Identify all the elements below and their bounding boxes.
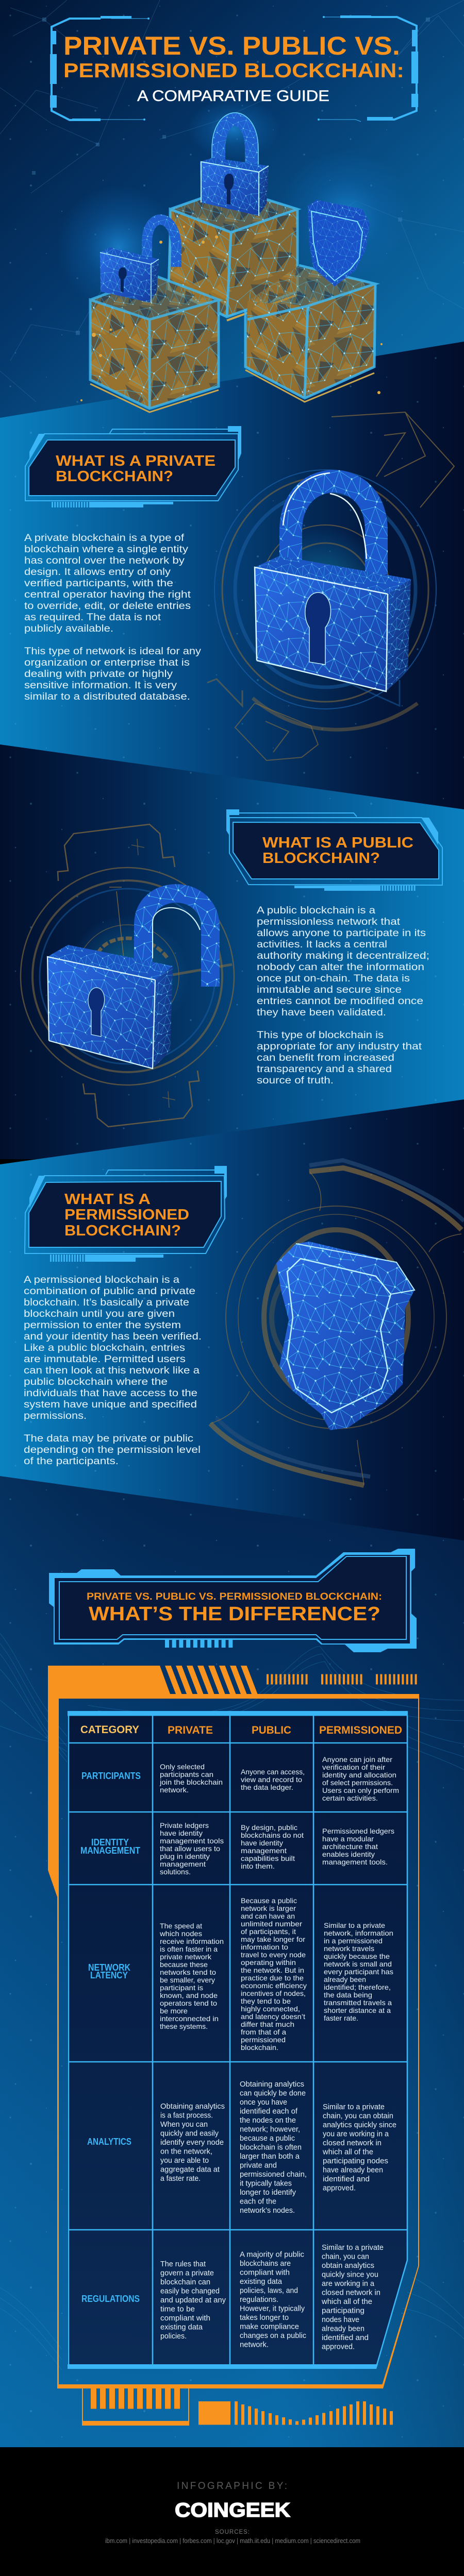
row: analytics: network; however, — [240, 2126, 300, 2134]
row: network latency: incentives of nodes, — [241, 1990, 306, 1997]
row: regulations: make compliance — [240, 2323, 299, 2331]
row: network latency: operators tend to — [160, 1999, 217, 2007]
heading: WHAT IS A — [64, 1191, 151, 1208]
row: regulations: blockchains are — [240, 2260, 291, 2268]
hero network lines — [0, 0, 464, 402]
section 2 text: they have been validated. — [257, 1007, 386, 1018]
section 2 text: once put on-chain. The data is — [257, 973, 410, 984]
row: participants: participants can — [160, 1771, 213, 1778]
row: network latency: practice due to the — [241, 1974, 304, 1982]
row labels: NETWORK — [88, 1962, 131, 1973]
hero title frame — [50, 15, 418, 122]
heading: BLOCKCHAIN? — [56, 468, 173, 485]
row: network latency: highly connected, — [241, 2005, 300, 2013]
row: network latency: from that of a — [241, 2028, 286, 2036]
row labels: ANALYTICS — [87, 2136, 131, 2147]
section 2 text: allows anyone to participate in its — [257, 928, 426, 939]
section 3 text: A permissioned blockchain is a — [24, 1275, 179, 1285]
table header: PERMISSIONED — [319, 1724, 402, 1736]
row: regulations: policies. — [160, 2332, 187, 2341]
row: analytics: When you can — [160, 2121, 208, 2129]
section 2 decorative watch rings — [21, 824, 234, 1127]
heading: WHAT IS A PUBLIC — [262, 835, 413, 851]
sources: SOURCES: — [215, 2529, 250, 2535]
row: regulations: regulations. — [240, 2296, 278, 2304]
section 1 text: dealing with private or highly — [24, 669, 173, 680]
row: regulations: compliant with — [240, 2269, 290, 2277]
credit line: INFOGRAPHIC BY: — [177, 2481, 287, 2492]
row: network latency: network, information — [324, 1929, 393, 1937]
row: network latency — [159, 1897, 393, 2052]
section 1 text: central operator having the right — [24, 589, 191, 600]
section 2 text: permissionless network that — [257, 917, 401, 927]
row: analytics: quickly and easily — [160, 2130, 219, 2138]
section 2 text: can benefit from increased — [257, 1053, 394, 1063]
row: network latency: which nodes — [159, 1930, 202, 1938]
section 3 text: permission to enter the system — [24, 1320, 181, 1331]
row: regulations: takes longer to — [240, 2314, 289, 2322]
icon: centre block — [169, 188, 297, 320]
hero title — [63, 31, 404, 105]
section 1 text: to override, edit, or delete entries — [24, 601, 191, 612]
row labels: REGULATIONS — [81, 2293, 140, 2304]
section 3 text: Like a public blockchain, entries — [24, 1343, 185, 1353]
section 3 text: system have unique and specified — [24, 1399, 197, 1410]
section 3 text: permissions. — [24, 1411, 87, 1421]
row: identity management: management tools — [160, 1837, 224, 1845]
row: analytics: can quickly be done — [240, 2090, 306, 2098]
logo: CoinGeek: COINGEEK — [175, 2499, 290, 2521]
row: identity management: that allow users to — [160, 1845, 220, 1853]
icon: public blockchain open padlock — [47, 893, 210, 1069]
row: analytics: larger than both a — [240, 2153, 300, 2161]
difference heading panel — [49, 1549, 417, 1652]
row: network latency: be more — [160, 2007, 188, 2015]
row: network latency: receive information — [160, 1938, 224, 1945]
section 1 text: as required. The data is not — [24, 612, 161, 623]
row: analytics: Obtaining analytics — [160, 2103, 225, 2111]
row: network latency: operating within — [241, 1959, 296, 1967]
row: participants: network. — [160, 1786, 189, 1794]
row: participants: verification of their — [322, 1764, 386, 1771]
row: network latency: private network — [160, 1953, 211, 1961]
row: participants: the data ledger. — [241, 1784, 293, 1791]
heading — [64, 1191, 189, 1239]
section 1 text: design. It allows entry of only — [24, 567, 171, 578]
row: identity management: Private ledgers — [160, 1822, 209, 1829]
section 2 text: A public blockchain is a — [257, 905, 376, 916]
section 1 text: sensitive information. It is very — [24, 680, 177, 691]
row: analytics: permissioned chain, — [240, 2171, 307, 2179]
row: participants: Anyone can access, — [241, 1768, 305, 1776]
row: analytics: network’s nodes. — [240, 2207, 295, 2215]
row: network latency: known, and node — [160, 1992, 218, 1999]
row: identity management: architecture that — [322, 1843, 378, 1851]
row: analytics: you are working in a — [323, 2130, 389, 2138]
section 3 text: blockchain. It’s basically a private — [24, 1297, 189, 1308]
table header — [80, 1724, 402, 1736]
row: identity management: have identity — [160, 1829, 203, 1837]
row: identity management: plug in identity — [160, 1853, 210, 1860]
row: analytics: participating nodes — [323, 2157, 388, 2165]
row: network latency: networks tend to — [160, 1969, 216, 1976]
row: regulations: identified and — [322, 2334, 369, 2342]
section 2 heading panel — [226, 809, 442, 891]
row: regulations: participating — [322, 2307, 364, 2315]
section 2 text: nobody can alter the information — [257, 962, 424, 973]
icon: left block — [90, 276, 219, 412]
heading: WHAT’S THE DIFFERENCE? — [89, 1603, 380, 1625]
section 3 text: The data may be private or public — [24, 1433, 193, 1444]
table header: PRIVATE — [168, 1724, 213, 1736]
section 3 text: individuals that have access to the — [24, 1388, 197, 1399]
row: network latency: travel to every node — [241, 1951, 306, 1959]
section 1 text: A private blockchain is a type of — [24, 533, 185, 544]
section 1 text: similar to a distributed database. — [24, 691, 190, 702]
row: analytics: approved. — [323, 2184, 356, 2193]
row: analytics: aggregate data at — [160, 2166, 220, 2174]
hero title: PERMISSIONED BLOCKCHAIN: — [63, 60, 404, 82]
sources — [105, 2529, 360, 2545]
background waves — [0, 1633, 464, 2370]
heading: BLOCKCHAIN? — [64, 1223, 181, 1239]
row: network latency: and can have an — [241, 1912, 295, 1920]
bottom orange decoration — [82, 2388, 393, 2426]
row: regulations: chain, you can — [322, 2252, 369, 2261]
section 1 text: This type of network is ideal for any — [24, 646, 202, 657]
row: identity management: enables identity — [322, 1851, 375, 1858]
row: regulations: policies, laws, and — [240, 2286, 298, 2295]
row: regulations: time to be — [160, 2305, 195, 2313]
section 3 heading panel — [25, 1166, 227, 1262]
row: analytics: private and — [240, 2162, 277, 2170]
heading: BLOCKCHAIN? — [262, 850, 380, 867]
section 3 text: public blockchain where the — [24, 1377, 168, 1387]
row: participants: join the blockchain — [159, 1778, 223, 1786]
row: network latency: and latency doesn’t — [241, 2013, 305, 2021]
row: regulations: However, it typically — [240, 2305, 305, 2313]
section 1 text — [24, 533, 202, 702]
icon: top padlock — [200, 113, 269, 216]
row labels: IDENTITY — [91, 1837, 129, 1848]
icon: private blockchain closed padlock — [255, 473, 411, 691]
heading: PRIVATE VS. PUBLIC VS. PERMISSIONED BLOCKCHAIN: — [87, 1591, 382, 1602]
icon: hero shield — [308, 200, 370, 286]
comparison table — [68, 1711, 408, 2369]
row: identity management: have identity — [241, 1839, 283, 1847]
section 1 text: verified participants, with the — [24, 578, 173, 589]
row: network latency: transmitted travels a — [324, 1999, 392, 2007]
sources: ibm.com | investopedia.com | forbes.com | loc.gov | math.iit.edu | medium.com | sciencedirect.com — [105, 2537, 360, 2545]
row: regulations: existing data — [160, 2324, 203, 2332]
gold particles — [80, 226, 383, 401]
row: identity management: have a modular — [322, 1835, 374, 1843]
row: network latency: blockchain. — [241, 2044, 278, 2052]
row: network latency: participant is — [160, 1984, 203, 1992]
row: regulations: obtain analytics — [322, 2262, 374, 2270]
row: analytics: closed network in — [323, 2139, 382, 2147]
row: network latency: The speed at — [160, 1922, 202, 1930]
heading — [56, 453, 216, 485]
row: analytics: Similar to a private — [323, 2103, 385, 2111]
row: identity management: Permissioned ledgers — [322, 1827, 394, 1835]
section 2 text: transparency and a shared — [257, 1064, 392, 1075]
row: analytics: because a public — [240, 2134, 295, 2143]
row: network latency: may take longer for — [241, 1936, 306, 1943]
orange table frame — [48, 1666, 419, 2388]
section 3 text: and your identity has been verified. — [24, 1331, 202, 1342]
section 2 text — [257, 905, 429, 1086]
row: regulations: A majority of public — [240, 2250, 304, 2259]
row: identity management: management — [160, 1860, 206, 1868]
row: regulations: network. — [240, 2341, 269, 2349]
row: analytics: a faster rate. — [160, 2175, 201, 2183]
section 2 text: This type of blockchain is — [257, 1030, 384, 1041]
row: participants: identity and allocation — [322, 1771, 396, 1779]
section 3 decorative rings — [210, 1160, 464, 1485]
heading — [262, 835, 413, 867]
row: analytics: identify every node — [160, 2139, 224, 2147]
row: analytics: is a fast process. — [160, 2111, 213, 2120]
row: regulations: changes on a public — [240, 2332, 306, 2340]
row: regulations: compliant with — [160, 2314, 210, 2323]
row labels: LATENCY — [90, 1970, 128, 1980]
row: identity management: into them. — [241, 1862, 275, 1870]
row labels — [80, 1770, 141, 2304]
section 3 text: of the participants. — [24, 1456, 119, 1467]
row: analytics: which all of the — [322, 2148, 373, 2157]
row: analytics: have already been — [323, 2166, 383, 2174]
heading: WHAT IS A PRIVATE — [56, 453, 216, 469]
section 1 decorative rings — [207, 412, 454, 760]
row: regulations: which all of the — [321, 2298, 372, 2306]
row: network latency: already been — [324, 1976, 366, 1984]
row: participants: view and record to — [241, 1776, 302, 1784]
icon: right block — [245, 265, 375, 402]
row: analytics: blockchain is often — [240, 2143, 302, 2151]
section 3 text: combination of public and private — [24, 1286, 195, 1297]
row: regulations: The rules that — [160, 2260, 206, 2268]
hero title: PRIVATE VS. PUBLIC VS. — [63, 31, 400, 60]
row: network latency: network travels — [324, 1945, 374, 1953]
row: network latency: shorter distance at a — [324, 2007, 391, 2014]
row: network latency: unlimited number — [241, 1920, 303, 1928]
row: participants: Anyone can join after — [322, 1756, 392, 1764]
row: analytics: you are able to — [160, 2157, 209, 2165]
row: regulations: are working in a — [322, 2280, 375, 2288]
row: regulations: approved. — [322, 2343, 355, 2351]
row: analytics: identified and — [323, 2175, 370, 2183]
heading: PERMISSIONED — [64, 1207, 189, 1223]
row: analytics — [160, 2080, 396, 2215]
footer — [0, 2447, 464, 2576]
row: regulations: quickly since you — [322, 2271, 378, 2279]
row: identity management: management tools. — [322, 1858, 388, 1866]
hero illustration: blocks with locks and shield — [57, 98, 412, 412]
row: identity management: capabilities built — [241, 1855, 295, 1862]
icon: open padlock — [100, 219, 176, 302]
row: network latency: they tend to be — [241, 1997, 291, 2005]
section 3 text: are immutable. Permitted users — [24, 1354, 186, 1365]
row: network latency: network is small and — [324, 1960, 392, 1968]
row: network latency: interconnected in — [160, 2015, 219, 2023]
section 3 text: depending on the permission level — [24, 1445, 201, 1455]
row: network latency: quickly because the — [324, 1953, 390, 1960]
section 2 text: authority making it decentralized; — [257, 951, 429, 961]
row: network latency: the data being — [324, 1991, 372, 1999]
row: analytics: identified each of — [240, 2107, 298, 2115]
section 2 text: immutable and secure since — [257, 985, 402, 995]
row: identity management: blockchains do not — [241, 1832, 304, 1839]
row: regulations — [160, 2244, 384, 2351]
row: identity management: management — [241, 1847, 287, 1855]
row: network latency: faster rate. — [324, 2014, 358, 2022]
row: participants: Users can only perform — [322, 1787, 399, 1794]
section 3 text: blockchain until you are given — [24, 1309, 175, 1319]
section 2 text: entries cannot be modified once — [257, 996, 423, 1007]
row: network latency: differ that much — [241, 2021, 294, 2028]
row: regulations: existing data — [240, 2278, 283, 2286]
row: identity management: By design, public — [241, 1824, 297, 1832]
row: participants: certain activities. — [322, 1794, 378, 1802]
row: regulations: blockchain can — [160, 2278, 210, 2286]
row: network latency: network is larger — [241, 1905, 296, 1912]
row: network latency: the network. But in — [241, 1967, 304, 1974]
section 1 text: blockchain where a single entity — [24, 544, 189, 555]
section 1 text: has control over the network by — [24, 555, 185, 566]
row: analytics: longer to identify — [240, 2189, 296, 2197]
row: network latency: permissioned — [241, 2036, 286, 2044]
row: analytics: each of the — [240, 2198, 276, 2206]
row: analytics: analytics quickly since — [323, 2121, 396, 2129]
section 1 heading panel — [25, 426, 241, 507]
hero title: A COMPARATIVE GUIDE — [137, 88, 329, 105]
row: participants: of select permissions. — [322, 1779, 393, 1787]
row: network latency: every participant has — [324, 1968, 393, 1976]
section 3 text: can then look at this network like a — [24, 1365, 200, 1376]
row: regulations: already been — [322, 2325, 364, 2333]
row: network latency: be smaller, every — [160, 1976, 215, 1984]
table header: PUBLIC — [252, 1724, 291, 1736]
row: network latency: is often faster in a — [160, 1945, 218, 1953]
section 2 text: appropriate for any industry that — [257, 1041, 422, 1052]
row: network latency: these systems. — [160, 2023, 208, 2030]
row labels: MANAGEMENT — [80, 1845, 141, 1856]
row: identity management: solutions. — [160, 1868, 191, 1876]
table header: CATEGORY — [80, 1724, 139, 1736]
row: analytics: on the network, — [160, 2147, 212, 2156]
section 2 text: activities. It lacks a central — [257, 939, 387, 950]
row: network latency: identified; therefore, — [324, 1984, 391, 1991]
row: regulations: govern a private — [160, 2269, 214, 2277]
section 2 text: source of truth. — [257, 1075, 334, 1086]
row: network latency: information to — [241, 1943, 288, 1951]
row: analytics: it typically takes — [240, 2179, 292, 2188]
icon: permissioned blockchain shield — [276, 1242, 415, 1430]
row: regulations: closed network in — [322, 2289, 380, 2297]
row: network latency: economic efficiency — [241, 1982, 307, 1990]
row: network latency: because these — [160, 1961, 208, 1969]
row: analytics: Obtaining analytics — [240, 2080, 304, 2089]
section 3 text — [24, 1275, 202, 1467]
row: network latency: Similar to a private — [324, 1922, 385, 1929]
row: regulations: Similar to a private — [322, 2244, 384, 2252]
section 1 text: publicly available. — [24, 623, 113, 634]
row: participants: Only selected — [160, 1763, 205, 1771]
row: regulations: easily be changed — [160, 2287, 220, 2296]
row: regulations: and updated at any — [160, 2296, 226, 2304]
row: network latency: in a permissioned — [324, 1937, 383, 1945]
row: network latency: of participants, it — [241, 1928, 296, 1936]
row: participants — [159, 1756, 399, 1802]
row: regulations: nodes have — [322, 2316, 359, 2324]
row labels: PARTICIPANTS — [81, 1770, 141, 1781]
row: analytics: the nodes on the — [240, 2116, 296, 2125]
row: network latency: Because a public — [241, 1897, 297, 1905]
heading — [87, 1591, 382, 1625]
row: analytics: chain, you can obtain — [323, 2112, 393, 2121]
row: identity management — [160, 1822, 394, 1876]
section 1 text: organization or enterprise that is — [24, 657, 190, 668]
row: analytics: once you have — [240, 2098, 287, 2107]
